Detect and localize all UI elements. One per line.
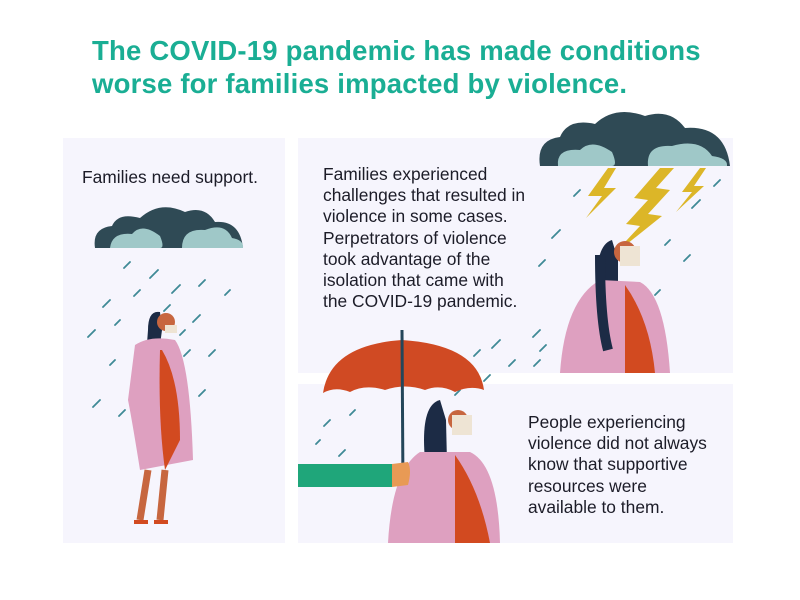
icon: left cloud (95, 207, 243, 248)
text: challenges: Perpetrators of violence (323, 228, 507, 248)
icon: lightning (586, 168, 706, 256)
rain right (316, 180, 720, 456)
text: families need support: Families need support. (82, 167, 258, 187)
title: worse for families impacted by violence. (92, 68, 627, 99)
panel: top right (298, 138, 733, 373)
text: challenges: challenges that resulted in (323, 185, 525, 205)
figure: left woman (128, 312, 193, 522)
icon: umbrella (323, 330, 484, 503)
text: challenges: isolation that came with (323, 270, 504, 290)
icon: helping arm (298, 462, 410, 487)
text: resources: resources were (528, 476, 647, 496)
text: resources: violence did not always (528, 433, 707, 453)
title: The COVID-19 pandemic has made conditions (92, 35, 701, 66)
text: challenges: Families experienced (323, 164, 487, 184)
text: resources: People experiencing (528, 412, 686, 432)
icon: storm cloud (539, 112, 730, 166)
title (92, 35, 701, 99)
panel: bottom right (298, 384, 733, 543)
text: challenges: the COVID-19 pandemic. (323, 291, 517, 311)
text: challenges: violence in some cases. (323, 206, 508, 226)
text: challenges (323, 164, 525, 311)
figure: top right woman (560, 240, 670, 373)
figure: bottom woman (388, 400, 500, 543)
text: challenges: took advantage of the (323, 249, 490, 269)
text: resources (528, 412, 707, 517)
text: resources: know that supportive (528, 454, 688, 474)
rain left (88, 262, 230, 416)
text: resources: available to them. (528, 497, 664, 517)
panel: left (63, 138, 285, 543)
